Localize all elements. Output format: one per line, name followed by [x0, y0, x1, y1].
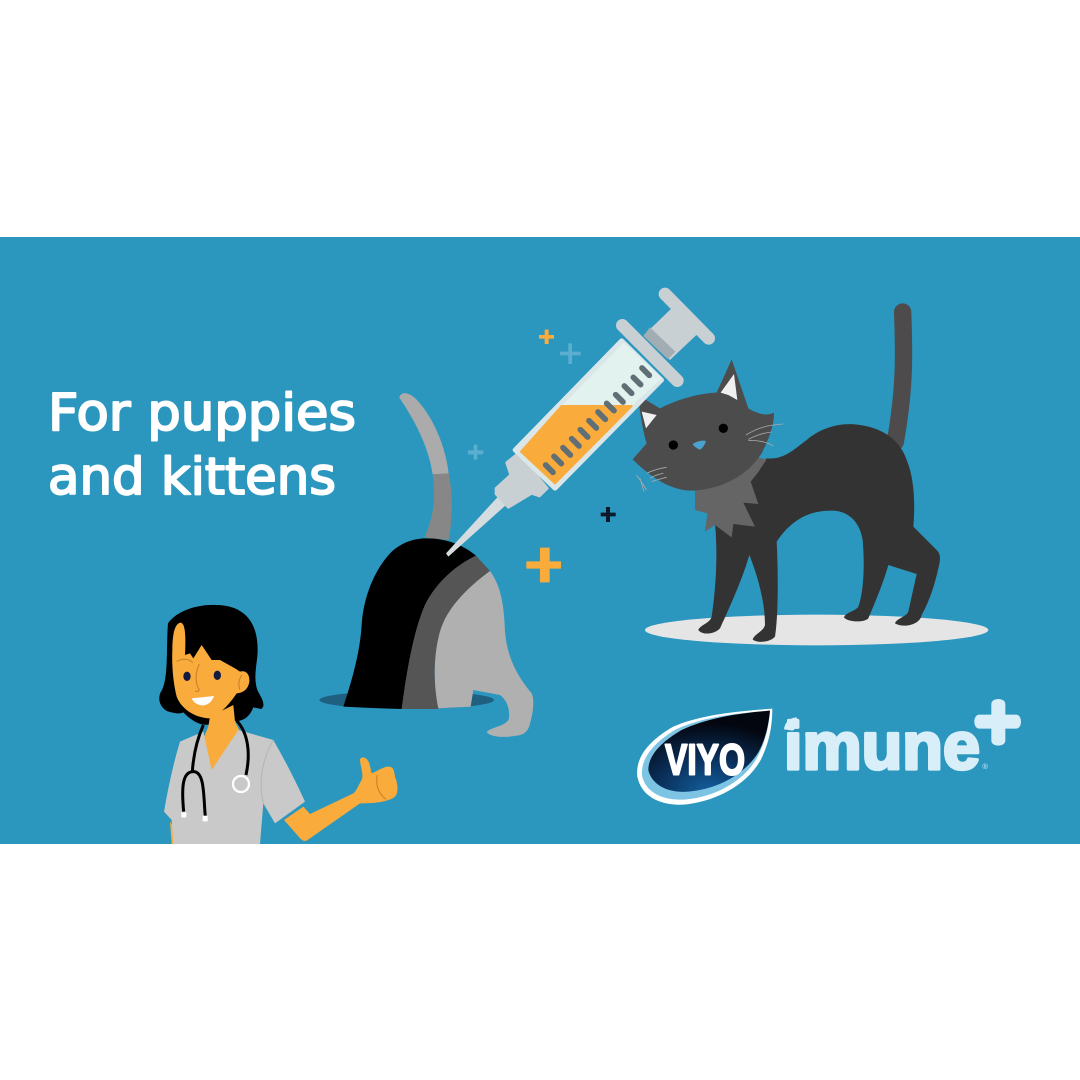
vet right arm and thumb: [284, 757, 397, 841]
vet smile: [192, 696, 214, 705]
i accent mask: [780, 712, 795, 727]
thumb crease: [377, 775, 386, 799]
vet face: [172, 623, 249, 718]
cat neck ruff: [695, 457, 767, 537]
imune wordmark: imune: [784, 710, 980, 784]
heading: for puppies and kittens: [48, 384, 356, 507]
faint plus beside tail: [468, 445, 483, 460]
vet facial lines: [177, 659, 242, 691]
panel: blue background band: [0, 237, 1080, 844]
needle hub: [496, 453, 547, 507]
cat eyes: [669, 424, 728, 450]
vet eyes: [183, 671, 221, 681]
stethoscope: [181, 721, 249, 821]
small pluses: [468, 330, 616, 522]
large orange plus: [526, 548, 561, 582]
illustration: syringe: [446, 294, 709, 557]
heading: for puppies and kittens: and kittens: [48, 448, 336, 507]
plus sign: [974, 699, 1021, 746]
plunger rod: [644, 305, 702, 360]
plunger band: [643, 327, 675, 359]
plunger thumb rest: [665, 294, 709, 338]
illustration: cat standing: [633, 312, 988, 645]
vet scrubs: [164, 730, 305, 844]
barrel flange: [622, 325, 677, 381]
needle: [446, 497, 506, 557]
cat whiskers: [637, 424, 783, 492]
cat shadow: [645, 615, 988, 645]
viyo drop emblem: [637, 709, 772, 805]
cat body: [698, 424, 940, 642]
registered mark: ®: [982, 762, 988, 771]
vet left arm: [170, 822, 180, 844]
vaccine liquid: [521, 406, 632, 483]
viyo wordmark: VIYO: [665, 737, 745, 785]
hole: [319, 691, 494, 709]
dog body black patch: [343, 538, 476, 709]
cat ears inner: [642, 374, 737, 428]
heading: for puppies and kittens: For puppies: [48, 384, 356, 443]
vet neck: [200, 705, 240, 772]
scrubs seam: [261, 740, 273, 803]
illustration: vet giving thumbs up: [159, 605, 397, 844]
cat head: [633, 359, 774, 491]
dog body grey stripe: [402, 556, 490, 709]
cat tail: [895, 312, 904, 442]
barrel: [515, 341, 662, 488]
dog rear leg: [435, 571, 533, 737]
vet hair: [159, 605, 263, 725]
illustration: dog in hole: [319, 393, 561, 737]
logo: viyo imune plus: [637, 699, 1021, 805]
barrel clear section: [562, 343, 662, 406]
scale ticks: [546, 368, 649, 472]
cat nose: [693, 441, 706, 450]
dog tail: [399, 393, 452, 540]
